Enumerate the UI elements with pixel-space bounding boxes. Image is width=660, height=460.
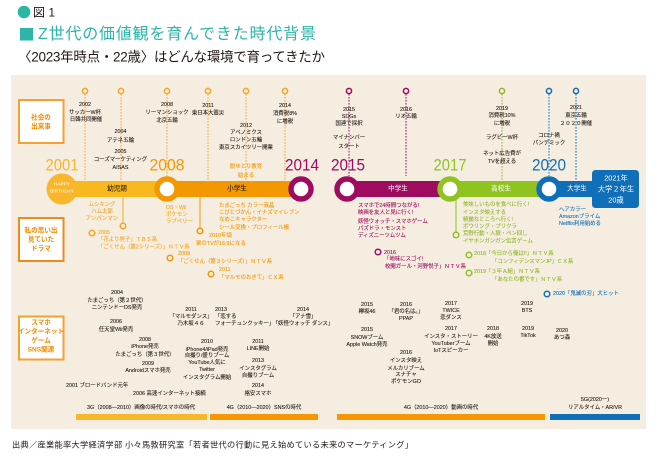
society events text: later era: コロナ禍 [538,131,560,139]
smartphone and internet events: 4G video era: 2019 [521,301,533,307]
label box: memories and dramas: 私の思い出 [25,226,57,234]
smartphone and internet events: 4G SNS era: 自撮り/盛りブーム [185,351,230,359]
society events text: later era: マイナンバー [333,134,365,141]
timeline bar: 高校生 [491,184,511,192]
smartphone and internet events: 4G SNS era: 「アナ雪」 [290,313,316,320]
society events text: later era: SDGs [342,114,356,120]
label box: smartphone internet games SNS: インターネット [18,326,64,336]
timeline years: 2020 [532,156,566,174]
smartphone and internet events: 4G video era: 2017 [445,326,457,332]
smartphone and internet events: 4G SNS era [169,307,333,411]
smartphone and internet events: 4G SNS era: iPhone4/iPad発売 [186,345,229,353]
smartphone and internet events: 4G SNS era: インスタグラム開始 [183,373,232,381]
society events text: orange era: 東京スカイツリー開業 [219,143,274,151]
smartphone and internet events: 4G video era: 2016 [400,302,412,308]
memories: elementary school: DS・Wii [166,205,186,211]
society events text: orange era: サッカーW杯 [69,108,102,116]
memories: elementary school: ラブベリー [166,217,193,225]
smartphone and internet events: 4G video era: BTS [522,308,533,314]
label box: memories and dramas [19,218,64,261]
label box: memories and dramas: ドラマ [31,244,51,252]
box: 2021 second-year university student: 20歳 [608,196,624,204]
smartphone and internet events: 4G video era: 4G（2010—2020）動画の時代 [404,403,479,411]
smartphone and internet events: 3G era: 任天堂Wii発売 [99,325,134,333]
memories: high school: 「コンフィデンスマンJP」ＣＸ系 [492,257,574,265]
society events text: orange era: 日韓共同開催 [70,115,103,123]
label box: smartphone internet games SNS: スマホ [31,318,51,326]
memories: high school: 美味しいものを食べに行く! [463,200,530,208]
smartphone and internet events: 4G video era: 5G(2020ー) [581,397,609,403]
smartphone and internet events: 3G era: 2009 [142,361,154,367]
memories: kindergarten: 「花より男子」ＴＢＳ系 [98,235,158,243]
smartphone and internet events: 4G video era: TikTok [520,333,536,339]
smartphone and internet events: 4G video era: 4K放送 [484,332,502,340]
society events text: orange era: 消費税8% [273,109,297,117]
memories: university: ヘアカラー [559,206,586,213]
memories: kindergarten: 「ごくせん（第2シリーズ）」ＮＴＶ系 [98,242,190,250]
smartphone and internet events: 4G video era: ポケモンGO [391,377,421,385]
smartphone and internet events: 3G era: iPhone発売 [131,342,159,350]
smartphone and internet events: 3G era [66,290,206,411]
smartphone and internet events: 3G era: 2006 [110,319,122,325]
smartphone and internet events: 4G SNS era: YouTube人気に [188,358,226,366]
timeline years: 2017 [434,156,466,174]
smartphone and internet events: 4G video era: 2016 [400,350,412,356]
smartphone and internet events: 4G SNS era: 2011 [252,339,264,345]
smartphone and internet events: 4G video era [346,301,622,411]
society events text: orange era: 2004 [114,129,126,135]
smartphone and internet events: 3G era: 2001 ブロードバンド元年 [66,381,129,389]
society events text: later era: 国連で採択 [336,119,363,127]
timeline years: 2001 [46,156,78,174]
society events text: later era: パンデミック [533,138,565,146]
smartphone and internet events: 4G SNS era: 「マルモダンス」 [169,312,213,320]
society events text: orange era: 東日本大震災 [192,108,225,116]
smartphone and internet events: 4G video era: 開始 [488,339,499,347]
smartphone and internet events: 4G video era: インスタ・ストーリー [424,332,478,340]
society events text: later era: に増税 [494,119,511,127]
timeline years: 2008 [150,156,184,174]
society events text: later era: 2015 [343,107,355,113]
memories: high school: 綺麗なところへ行く! [463,215,514,223]
smartphone and internet events: 4G SNS era: 2013 [252,358,264,364]
subtitle: 〈2023年時点・22歳〉はどんな環境で育ってきたか [18,50,326,64]
memories: kindergarten: アンパンマン [86,215,118,222]
society events text: orange era: 2005 [114,149,126,155]
memories: university: Amazonプライム [559,213,601,220]
figure label: 図 1 [33,6,55,20]
smartphone and internet events: 4G SNS era: 2013 [215,307,227,313]
smartphone and internet events: 4G SNS era: 格安スマホ [245,389,272,397]
memories: high school: 2019「３年Ａ組」ＮＴＶ系 [474,267,541,275]
memories: university: Netflix利用始める [559,219,601,227]
memories: elementary school [166,197,300,281]
memories: high school: イヤホンガンガン伝言ゲーム [463,236,533,244]
timeline bar: BIRTHDAY [50,188,75,194]
society events text: orange era: 2002 [79,102,91,108]
smartphone and internet events: 3G era: たまごっち（第２世代） [87,296,147,304]
smartphone and internet events: 4G SNS era: Twitter [199,367,215,373]
label box: smartphone internet games SNS: ゲーム [31,336,51,344]
smartphone and internet events: 4G video era: リアルタイム・AR/VR [568,403,622,411]
smartphone and internet events: 3G era: 2008 [139,337,151,343]
source footer: 出典／産業能率大学経済学部 小々馬敦研究室「若者世代の行動に見え始めている未来のマーケティング」 [12,440,413,450]
memories: elementary school: たまごっち カラー液晶 [219,201,274,209]
society events text: later era: ラグビーW杯 [486,133,519,141]
smartphone and internet events: 4G SNS era: 「恋する [215,313,237,320]
society events text: later era [333,105,593,165]
smartphone and internet events: 3G era: 2006 高速インターネット接続 [133,389,206,397]
smartphone and internet events: 3G era: Androidスマホ発売 [125,366,171,374]
memories: elementary school: 家のTVが16:9になる [196,239,246,247]
smartphone and internet events: 4G video era: SNOWブーム [351,333,384,341]
memories: high school: 「あなたの番です」ＮＴＶ系 [492,276,563,283]
memories: junior high: ディズニーツムツム [358,231,406,239]
memories: high school [453,197,574,283]
memories: junior high: 2016 [384,250,396,256]
society events text: later era: 2016 [400,107,412,113]
panel: society events dotted lines [82,88,579,181]
timeline years [46,156,566,174]
smartphone and internet events: 4G video era: 欅坂46 [359,307,375,315]
memories: junior high: スマホで24時間つながる! [358,201,420,209]
smartphone and internet events: 3G era: 3G（2008—2010）画像の時代/スマホの時代 [87,403,196,411]
timeline bar [46,174,599,204]
memories: elementary school: こびとづかん・イナズマイレブン [219,208,300,216]
society events text: orange era: アベノミクス [230,129,262,136]
smartphone and internet events: 4G video era: メルカリブーム [387,364,425,372]
memories: junior high: 校閲ガール・河野悦子」ＮＴＶ系 [385,262,466,270]
society events text: later era: スタート [338,142,360,150]
society events text: later era: 2019 [496,106,508,112]
label box: memories and dramas: 見ていた [28,236,55,244]
smartphone and internet events: 4G video era: 「君の名は。」 [388,307,424,315]
society events text: orange era: 2012 [240,123,252,129]
smartphone and internet events: 4G video era: 2015 [361,302,373,308]
society events text: later era: TVを超える [488,157,516,165]
memories: elementary school: なめこキャラクター [219,215,267,223]
society events text: orange era: 2008 [161,102,173,108]
memories: high school: インスタ映えする [463,208,506,216]
label box: society events: 社会の [31,112,51,122]
smartphone and internet events: 4G video era: インスタ映え [390,356,422,364]
memories: high school: 2018「今日から俺は!!」ＮＴＶ系 [474,249,554,257]
memories: kindergarten: 2005 [98,230,110,236]
memories: high school: ボウリング・プリクラ [463,222,517,230]
memories: elementary school: 「ごくせん（第３シリーズ）」ＮＴＶ系 [178,257,273,265]
figure label [18,6,55,20]
timeline bar: 幼児期 [107,184,127,192]
memories: elementary school: 2008 [178,251,190,257]
smartphone and internet events: 4G video era: TWICE [442,308,460,314]
smartphone and internet events: 4G video era: YouTuberブーム [432,339,471,347]
memories: elementary school: シール交換・プロフィール帳 [219,223,290,231]
smartphone and internet events: 4G SNS era: フォーチュンクッキー」 [215,320,274,327]
timeline bar: HAPPY [54,182,71,188]
society events text: orange era: アテネ五輪 [107,136,135,144]
box: 2021 second-year university student: 大学２年生 [598,184,634,194]
memories: elementary school: 「マルモのおきて」ＣＸ系 [219,274,284,281]
society events text: later era: 消費税10% [489,111,516,119]
smartphone and internet events: 4G SNS era: 2011 [185,307,197,313]
society events text: orange era: 脱ゆとり教育 [230,162,263,170]
memories: university: 2020「鬼滅の刃」大ヒット [553,289,619,297]
smartphone and internet events: 4G video era: 恋ダンス [440,313,462,321]
smartphone and internet events: 4G video era: 2019 [522,326,534,332]
society events text: orange era: 北京五輪 [156,116,178,124]
title: Z世代の価値観を育んできた時代背景 [38,25,316,43]
smartphone and internet events: 4G SNS era: 4G（2010—2020）SNSの時代 [227,403,302,411]
label box: smartphone internet games SNS [18,316,64,360]
timeline bar: 中学生 [388,184,408,192]
background panel [11,75,646,429]
society events text: orange era: リーマンショック [145,109,189,116]
smartphone and internet events: 3G era: たまごっち（第３世代） [115,350,175,358]
smartphone and internet events: 4G video era: スナチャ [395,371,417,378]
smartphone and internet events: 4G video era: あつ森 [554,333,571,341]
memories: elementary school: 2011 [219,267,231,273]
memories: junior high: 映画を友人と見に行く! [358,208,414,216]
society events text: later era: リオ五輪 [395,112,417,120]
society events text: later era: ネット広告費が [483,149,521,157]
timeline bar: 小学生 [227,184,247,192]
smartphone and internet events: 4G video era: 2018 [487,326,499,332]
smartphone and internet events: 4G SNS era: 乃木坂４６ [178,319,204,327]
memories: kindergarten [86,197,190,250]
smartphone and internet events: 4G video era: Apple Watch発売 [346,340,388,348]
label box: smartphone internet games SNS: SNS関連 [28,344,55,354]
memories: elementary school: ポケモン [166,210,188,218]
society events text: later era: 東京五輪 [565,111,587,119]
society events text: orange era: コーズマーケティング [94,155,148,163]
smartphone and internet events: 4G SNS era: 「妖怪ウォッチ ダンス」 [273,319,333,327]
smartphone and internet events: 4G video era: IoTスピーカー [434,347,468,354]
memories: junior high: パズドラ・モンスト [358,224,406,232]
society events text: orange era: 2011 [202,103,214,109]
label box: society events: 出来事 [31,122,51,130]
timeline years: 2014 [285,156,319,174]
smartphone and internet events: 4G SNS era: 2010 [201,339,213,345]
memories: kindergarten: ハム太郎 [91,207,113,215]
memories: junior high: 妖怪ウォッチ・スマホゲーム [358,217,428,225]
memories: university [544,206,619,297]
smartphone and internet events: 4G SNS era: 2014 [297,307,309,313]
smartphone and internet events: 3G era: 2004 [111,290,123,296]
memories: elementary school: 2010年頃 [209,231,232,239]
society events text: orange era: 始まる [238,171,254,179]
smartphone and internet events: 4G SNS era: 2014 [252,383,264,389]
society events text: orange era: 2014 [279,103,291,109]
smartphone and internet events: 4G SNS era: インスタグラム [239,364,277,372]
timeline bar: 大学生 [567,184,587,192]
box: 2021 second-year university student: 2021年 [604,174,628,182]
smartphone and internet events: 3G era: ニンテンドーDS発売 [92,303,143,311]
memories: junior high: 「地味にスゴイ! [384,254,424,262]
network era bars [76,414,640,420]
memories: high school: 荒野行動・人狼・ペン回し [463,229,528,237]
society events text: orange era [69,102,297,179]
timeline years: 2015 [331,156,365,174]
label box: society events [19,100,64,143]
memories: junior high [358,201,466,270]
society events text: later era: 2021 [570,105,582,111]
smartphone and internet events: 4G video era: 2020 [556,328,568,334]
smartphone and internet events: 4G video era: 2017 [445,301,457,307]
memories: kindergarten: ムシキング [89,200,116,208]
society events text: orange era: に増税 [277,117,294,125]
smartphone and internet events: 4G SNS era: 自撮りブーム [242,371,275,379]
smartphone and internet events: 4G video era: PPAP [399,316,413,322]
society events text: orange era: ロンドン五輪 [230,136,263,144]
box: 2021 second-year university student [592,170,639,208]
smartphone and internet events: 4G SNS era: LINE開始 [247,344,270,352]
smartphone and internet events: 4G video era: 2015 [361,327,373,333]
society events text: later era: ２０２０開催 [560,119,593,127]
society events text: orange era: AISAS [113,165,129,171]
